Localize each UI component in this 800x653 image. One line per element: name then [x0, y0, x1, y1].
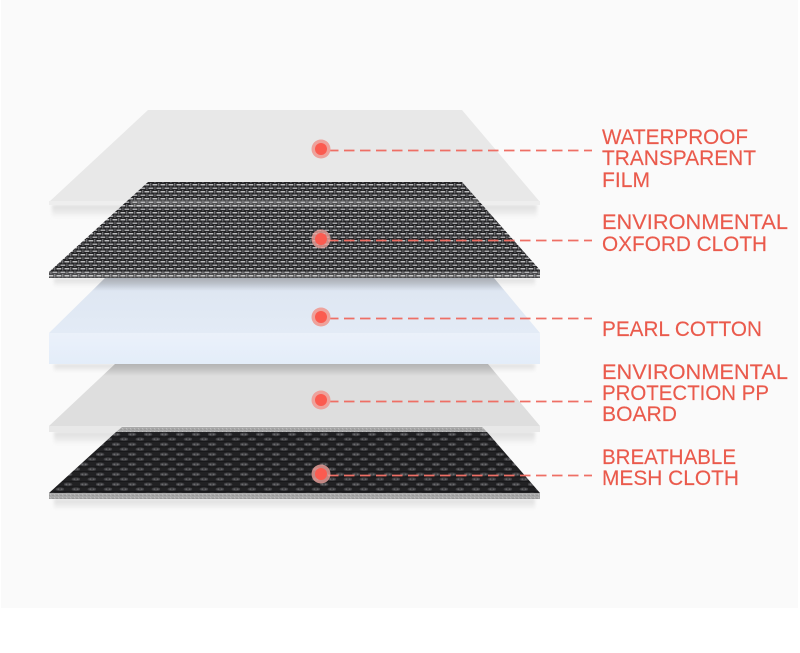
- callout: waterproof transparent film: TRANSPARENT: [602, 147, 756, 170]
- callout: waterproof transparent film: FILM: [602, 169, 650, 192]
- callout: environmental oxford cloth: OXFORD CLOTH: [602, 233, 767, 256]
- layer: environmental protection PP board: [49, 364, 540, 445]
- callout: waterproof transparent film: WATERPROOF: [602, 126, 748, 149]
- callout: environmental protection PP board: PROTECTION PP: [602, 382, 769, 405]
- callout: breathable mesh cloth: [312, 446, 739, 490]
- layer: breathable mesh cloth: [49, 427, 540, 510]
- callout: waterproof transparent film: [312, 126, 756, 192]
- callout: environmental protection PP board: BOARD: [602, 403, 677, 426]
- callout: pearl cotton: PEARL COTTON: [602, 318, 762, 341]
- callout: environmental protection PP board: [312, 361, 788, 426]
- layer: pearl cotton: [49, 278, 540, 372]
- callout: breathable mesh cloth: BREATHABLE: [602, 446, 736, 469]
- callout: environmental protection PP board: ENVIRONMENTAL: [602, 361, 788, 384]
- callout: environmental oxford cloth: ENVIRONMENTAL: [602, 211, 788, 234]
- callout: breathable mesh cloth: MESH CLOTH: [602, 467, 739, 490]
- layer: waterproof transparent film: [49, 110, 540, 218]
- callout: pearl cotton: [312, 308, 762, 341]
- layer: environmental oxford cloth: [49, 182, 540, 287]
- callout: environmental oxford cloth: [312, 211, 788, 256]
